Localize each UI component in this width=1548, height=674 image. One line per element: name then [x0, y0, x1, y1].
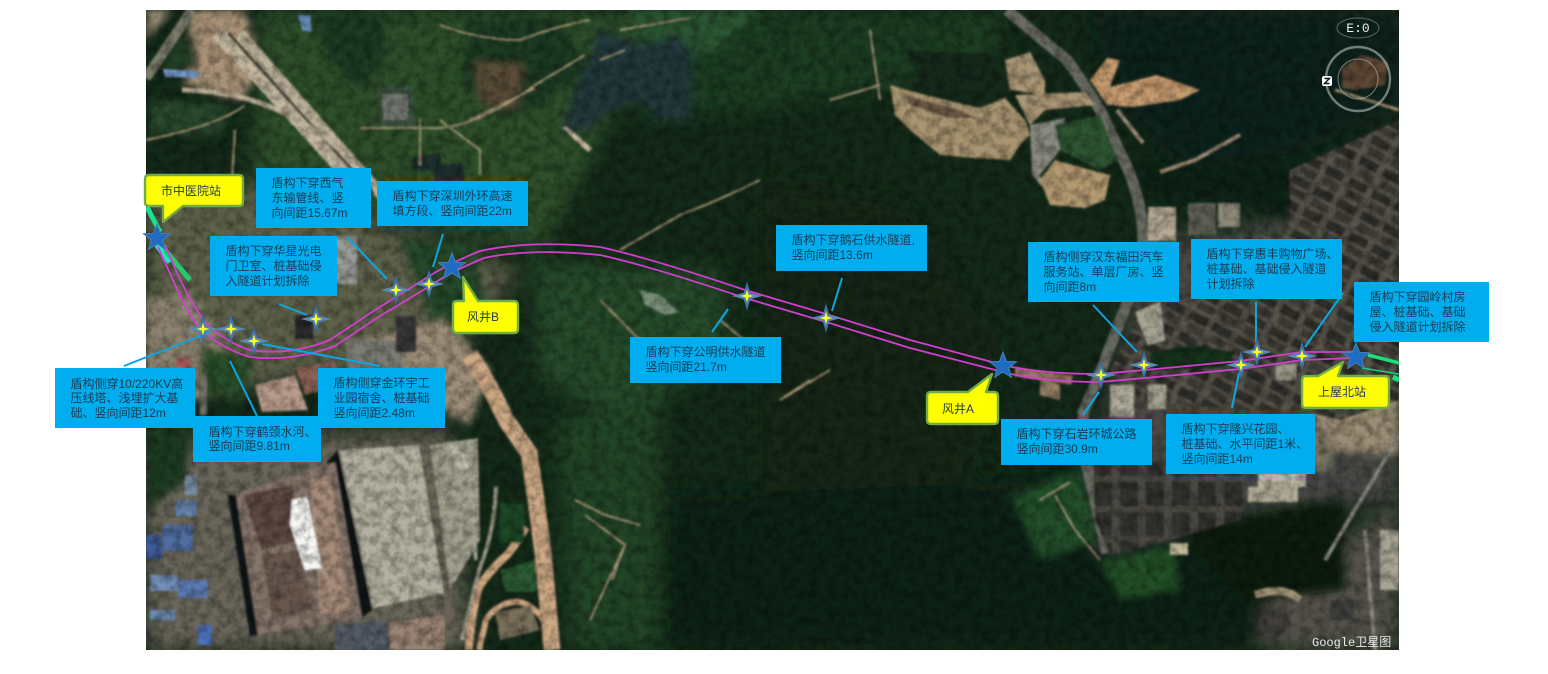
station and shaft stars	[143, 224, 1370, 377]
label: 园岭村房屋: 侵入隧道计划拆除	[1370, 319, 1466, 334]
label: 高压线塔: 盾构侧穿10/220KV高	[70, 376, 183, 391]
label: 隆兴花园: 盾构下穿隆兴花园、	[1182, 421, 1290, 436]
label: 汉东福田汽车服务站: 盾构侧穿汉东福田汽车	[1044, 249, 1164, 264]
label: 隆兴花园: 桩基础、水平间距1米、	[1182, 436, 1308, 451]
buildings left	[335, 236, 357, 284]
label: 鹅石供水隧道: 盾构下穿鹅石供水隧道,	[792, 232, 915, 247]
label: 深圳外环高速: 填方段、竖向间距22m	[392, 203, 512, 218]
label: 汉东福田汽车服务站: 服务站、单层厂房、竖	[1044, 264, 1164, 279]
callout: 市中医院站	[145, 175, 243, 222]
label: 鹤颈水河	[193, 416, 321, 462]
callout: 上屋北站: 上屋北站	[1318, 385, 1366, 399]
label: 石岩环城公路: 竖向间距30.9m	[1016, 441, 1098, 456]
label: 鹤颈水河: 盾构下穿鹤颈水河、	[208, 424, 317, 439]
big factory roofs	[339, 445, 444, 608]
expressway viaducts	[212, 27, 350, 168]
terrain details	[562, 126, 592, 152]
label: 公明供水隧道: 竖向间距21.7m	[646, 359, 727, 374]
label: 隆兴花园	[1166, 414, 1315, 474]
label: 石岩环城公路	[1001, 419, 1152, 465]
callout: 风井A	[927, 374, 998, 424]
label: 园岭村房屋	[1354, 282, 1489, 342]
callout: 上屋北站	[1302, 362, 1389, 408]
label: 汉东福田汽车服务站	[1028, 242, 1179, 302]
callout: 市中医院站: 市中医院站	[161, 183, 221, 198]
leader lines	[124, 234, 1343, 416]
label: 鹅石供水隧道	[776, 225, 927, 271]
label: 高压线塔	[55, 368, 195, 428]
station track: 市中医院站	[147, 207, 190, 280]
label: 园岭村房屋: 盾构下穿园岭村房	[1370, 289, 1466, 304]
label: 金环宇工业园宿舍: 竖向间距2.48m	[334, 405, 415, 420]
callout: 风井B: 风井B	[467, 310, 499, 324]
label: 惠丰购物广场: 桩基础、基础侵入隧道	[1206, 261, 1327, 276]
satellite map background	[146, 10, 1400, 650]
label: 华星光电门卫室: 盾构下穿华星光电	[226, 243, 322, 258]
callout: 风井B	[453, 277, 518, 333]
label: 惠丰购物广场: 计划拆除	[1206, 276, 1255, 291]
compass north marker	[1322, 76, 1332, 86]
urban blocks	[1100, 120, 1400, 440]
clearings bottom	[1040, 482, 1100, 560]
label: 深圳外环高速: 盾构下穿深圳外环高速	[392, 188, 513, 203]
label: 西气东输管线: 盾构下穿西气	[272, 175, 344, 190]
station track: 上屋北站	[1362, 355, 1399, 380]
label: 鹅石供水隧道: 竖向间距13.6m	[792, 247, 873, 262]
label: 深圳外环高速	[377, 181, 528, 226]
label: 石岩环城公路: 盾构下穿石岩环城公路	[1016, 426, 1137, 441]
label: 金环宇工业园宿舍	[318, 368, 445, 428]
tunnel alignment	[158, 244, 1355, 382]
label: 华星光电门卫室: 门卫室、桩基础侵	[226, 258, 322, 273]
label: 公明供水隧道	[630, 337, 781, 383]
label: 金环宇工业园宿舍: 业园宿舍、桩基础	[334, 390, 430, 405]
elevation label	[1337, 18, 1379, 38]
corridor and ramps	[470, 355, 552, 650]
label: 西气东输管线: 东输管线、竖	[272, 190, 344, 205]
label: 惠丰购物广场: 盾构下穿惠丰购物广场、	[1206, 246, 1339, 261]
label: 园岭村房屋: 屋、桩基础、基础	[1370, 304, 1466, 319]
label: 公明供水隧道: 盾构下穿公明供水隧道	[646, 344, 766, 359]
compass ring	[1326, 47, 1390, 111]
label: 高压线塔: 压线塔、浅埋扩大基	[70, 391, 179, 405]
main road	[1007, 10, 1143, 553]
lake	[563, 30, 692, 132]
crossing markers	[188, 269, 1317, 390]
label: 隆兴花园: 竖向间距14m	[1182, 451, 1253, 466]
label: 西气东输管线: 向间距15.67m	[272, 205, 348, 220]
elevation label: E:0	[1346, 21, 1370, 36]
callout: 风井A: 风井A	[942, 402, 974, 416]
label: 高压线塔: 础、竖向间距12m	[70, 405, 166, 420]
imagery attribution: Google卫星图	[1312, 635, 1391, 650]
label: 惠丰购物广场	[1191, 239, 1342, 299]
label: 华星光电门卫室: 入隧道计划拆除	[226, 273, 310, 288]
construction clearing	[890, 85, 1030, 160]
blue roofs	[146, 535, 162, 559]
label: 鹤颈水河: 竖向间距9.81m	[208, 438, 290, 453]
label: 西气东输管线	[256, 168, 371, 228]
label: 汉东福田汽车服务站: 向间距8m	[1044, 279, 1096, 294]
label: 金环宇工业园宿舍: 盾构侧穿金环宇工	[334, 375, 430, 390]
label: 华星光电门卫室	[210, 236, 337, 296]
